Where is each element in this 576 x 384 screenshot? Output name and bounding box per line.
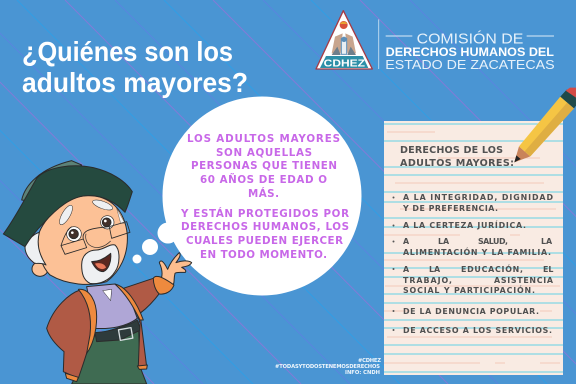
- nose: [86, 234, 111, 248]
- right: educacion: SOCIAL Y PARTICIPACIÓN.: [403, 284, 535, 295]
- list heading: DERECHOS DE LOS: [400, 145, 503, 156]
- collar: [103, 289, 112, 301]
- jacket right: [123, 278, 160, 367]
- cuff right: [137, 365, 147, 369]
- arm and hand: [153, 253, 192, 294]
- glasses: [61, 222, 130, 254]
- hair right: [117, 208, 125, 223]
- jacket left: [47, 290, 93, 378]
- jacket trim right: [115, 284, 143, 320]
- bullets: [392, 196, 394, 331]
- hair: [25, 232, 46, 265]
- right: integridad: Y DE PREFERENCIA.: [402, 204, 498, 213]
- right: educacion: [403, 263, 554, 295]
- bubble text: DERECHOS HUMANOS, LOS: [181, 221, 349, 233]
- face: [38, 196, 127, 284]
- list heading: [400, 145, 514, 169]
- logo text: [385, 30, 555, 72]
- trousers: [72, 322, 147, 384]
- list heading: ADULTOS MAYORES:: [400, 158, 514, 169]
- right: educacion: EL: [543, 265, 553, 274]
- bubble text: CUALES PUEDEN EJERCER: [186, 235, 343, 247]
- title: adultos mayores?: [22, 67, 248, 98]
- ear: [32, 262, 48, 276]
- eyebrows: [57, 198, 114, 227]
- bubble text: LOS ADULTOS MAYORES: [187, 133, 340, 145]
- title: [22, 36, 248, 98]
- right: educacion: A: [403, 265, 410, 274]
- title: ¿Quiénes son los: [22, 36, 233, 67]
- right: salud: LA: [438, 237, 450, 246]
- head: [3, 161, 132, 284]
- hat brim: [3, 166, 132, 247]
- bubble text: 60 AÑOS DE EDAD O: [200, 173, 327, 186]
- beard: [82, 245, 119, 284]
- logo text: ESTADO DE ZACATECAS: [385, 58, 555, 72]
- bubble text: MÁS.: [248, 187, 279, 200]
- hashtags: [275, 358, 381, 376]
- logo: CDHEZ: [316, 11, 555, 72]
- right: educacion: TRABAJO,: [403, 276, 452, 285]
- bubble text: EN TODO MOMENTO.: [200, 249, 327, 261]
- right: servicios: DE ACCESO A LOS SERVICIOS.: [403, 326, 552, 335]
- logo text: DERECHOS HUMANOS DEL: [386, 45, 554, 59]
- eyes: [67, 216, 114, 241]
- character: elderly man: [3, 161, 192, 384]
- notebook paper: [384, 121, 563, 375]
- icon: pencil: [514, 88, 576, 162]
- speech bubble: [132, 96, 362, 296]
- cuff: [153, 276, 174, 294]
- hand: [159, 253, 192, 286]
- right: educacion: LA: [429, 265, 441, 274]
- logo text: COMISIÓN DE: [417, 30, 523, 47]
- bubble text: [180, 133, 349, 261]
- hashtags: #TODASYTODOSTENEMOSDERECHOS: [275, 364, 380, 370]
- right: certeza: A LA CERTEZA JURÍDICA.: [403, 219, 526, 230]
- right: salud: A: [403, 237, 410, 246]
- body: [47, 278, 160, 384]
- bubble text: SON AQUELLAS: [216, 147, 312, 159]
- belt: [95, 320, 141, 342]
- rights list: [392, 193, 554, 335]
- hashtags: #CDHEZ: [358, 358, 381, 364]
- vest: [87, 284, 137, 329]
- right: salud: [403, 237, 553, 257]
- right: integridad: [402, 193, 553, 213]
- right: integridad: A LA INTEGRIDAD, DIGNIDAD: [403, 193, 553, 202]
- logo triangle: [316, 11, 372, 69]
- right: salud: SALUD,: [478, 237, 508, 246]
- hashtags: INFO: CNDH: [345, 370, 380, 376]
- logo triangle: CDHEZ: [324, 58, 365, 69]
- mouth: [92, 253, 111, 272]
- right: salud: LA: [541, 237, 553, 246]
- right: denuncia: DE LA DENUNCIA POPULAR.: [403, 307, 539, 316]
- right: salud: ALIMENTACIÓN Y LA FAMILIA.: [403, 246, 551, 257]
- hat crown: [22, 161, 82, 202]
- cuff left: [65, 373, 78, 382]
- bubble text: Y ESTÁN PROTEGIDOS POR: [180, 207, 349, 220]
- bubble text: PERSONAS QUE TIENEN: [191, 160, 337, 172]
- jacket trim left: [78, 289, 97, 353]
- right: educacion: ASISTENCIA: [494, 276, 554, 285]
- right: educacion: EDUCACIÓN,: [461, 263, 523, 274]
